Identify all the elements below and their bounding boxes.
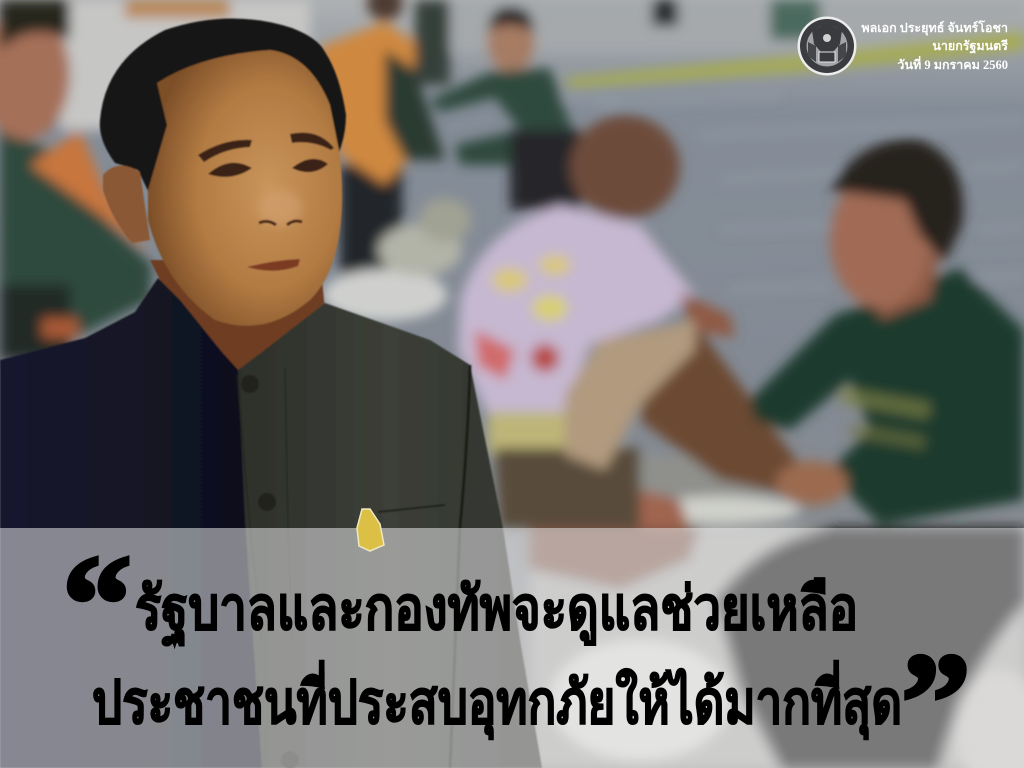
water ripples: [560, 95, 1024, 290]
jacket placket: [237, 368, 292, 640]
pocket line: [378, 505, 445, 512]
left soldier: [0, 0, 152, 360]
nostrils: [259, 221, 302, 225]
icon: government seal: [798, 16, 856, 76]
translucent quote panel: [0, 528, 1024, 768]
role: นายกรัฐมนตรี: [932, 39, 1008, 54]
jacket: navy shaded side: [0, 278, 268, 768]
name: พลเอก ประยุทธ์ จันทร์โอชา: [861, 20, 1008, 36]
quote text: [92, 576, 902, 740]
ear: [103, 166, 150, 243]
rear soldier: [430, 7, 572, 165]
eyebrows: [198, 140, 252, 162]
icon: yellow royal pin: [357, 509, 384, 551]
child being carried: [458, 115, 800, 580]
splash water: [323, 198, 800, 524]
hair: [100, 18, 346, 195]
lower water and dark boat: [530, 528, 1024, 768]
nose: [258, 190, 302, 226]
mouth: [247, 259, 300, 271]
attribution text: [861, 20, 1008, 72]
centre soldier with orange vest: [318, 0, 450, 275]
portrait of the prime minister: [0, 18, 542, 768]
jacket: olive lit side: [238, 303, 542, 768]
button lower: [258, 493, 276, 511]
button bottom: [281, 751, 299, 768]
sleeve seam: [450, 365, 470, 768]
opening quote mark: “: [62, 527, 132, 682]
right soldier: [750, 140, 1024, 525]
eye right: [292, 159, 328, 172]
button upper: [241, 375, 259, 393]
neck: [150, 260, 325, 380]
dark boat tone over panel: [715, 528, 1024, 768]
eye left: [208, 163, 252, 177]
quote line 1: รัฐบาลและกองทัพจะดูแลช่วยเหลือ: [135, 576, 858, 647]
date: วันที่ 9 มกราคม 2560: [897, 56, 1008, 72]
face: [148, 50, 342, 326]
